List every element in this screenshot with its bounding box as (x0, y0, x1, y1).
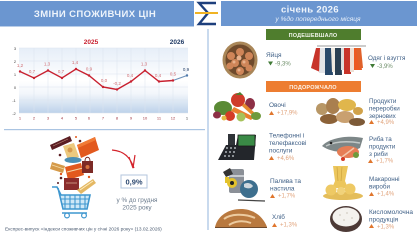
icon: telephone (218, 134, 256, 160)
item: dairy: продукція (369, 216, 399, 224)
data labels: 0,4 (127, 73, 134, 78)
x axis labels: 5 (75, 116, 78, 120)
item: pasta: +1,4% (377, 192, 395, 198)
line chart (12, 39, 190, 120)
y axis labels: 3 (14, 46, 17, 51)
data labels: 1,3 (44, 62, 51, 66)
item: vegetables: Овочі (269, 101, 286, 109)
data labels: 0,0 (101, 78, 108, 83)
caption: 2025 року (122, 204, 152, 212)
item: pasta (369, 175, 400, 198)
data labels: 1,3 (141, 62, 148, 66)
item: fuels: Палива та (270, 178, 301, 185)
y axis labels: -1 (12, 98, 17, 103)
left header banner (0, 1, 194, 27)
item: grain products (369, 98, 400, 126)
item: dairy: Кисломолочна (369, 209, 413, 216)
data labels: 1,2 (17, 63, 24, 68)
icon: sigma logo (195, 3, 218, 24)
item: fish (368, 135, 396, 164)
caption (116, 197, 158, 212)
item: fish: з риби (369, 150, 388, 158)
item: telecom services: +4,6% (277, 156, 295, 162)
y axis labels: 0 (14, 85, 17, 90)
icon: pasta (323, 166, 363, 200)
item: grain products: +4,9% (377, 120, 395, 126)
data points (19, 68, 188, 91)
item: fuels: настила (270, 186, 295, 192)
banner: more expensive: ПОДОРОЖЧАЛО (289, 85, 337, 91)
icon: bread (215, 209, 267, 228)
y axis labels: -2 (12, 111, 17, 116)
item: dairy (369, 209, 413, 230)
item: fish: Риба та (369, 135, 392, 143)
x axis labels: 12 (171, 116, 176, 120)
x axis labels: 7 (102, 116, 105, 120)
caption: у % до грудня (116, 197, 158, 204)
data line 2026 (173, 76, 187, 80)
right header banner (221, 1, 417, 26)
icon: shopping cart with goods (50, 136, 99, 218)
item: eggs: Яйця (266, 51, 282, 59)
item: fish: +1,7% (376, 158, 394, 164)
source note: Експрес-випуск «Індекси споживчих цін у січні 2026 року» (13.02.2026) (5, 226, 162, 232)
item: vegetables: +17,9% (277, 110, 298, 116)
banner: cheaper: ПОДЕШЕВШАЛО (289, 33, 338, 39)
icon: cottage cheese (330, 206, 362, 232)
data labels: 0,9 (183, 67, 190, 72)
data line 2025 (20, 69, 173, 90)
x axis labels: 9 (130, 116, 133, 120)
title: ЗМІНИ СПОЖИВЧИХ ЦІН (34, 9, 156, 20)
item: telecom services: Телефонні і (269, 132, 304, 140)
item: pasta: вироби (369, 182, 390, 190)
item: grain products: зернових (369, 113, 397, 120)
icon: vegetables (213, 92, 261, 122)
subtitle: у %до попереднього місяця (274, 15, 361, 23)
item: bread: +1,3% (280, 222, 298, 228)
date heading: січень 2026 (281, 4, 339, 16)
x axis labels (19, 116, 189, 120)
item: telecom services: телефаксові (269, 139, 306, 147)
item: clothing and footwear: -3,9% (377, 64, 393, 70)
section divider (4, 129, 205, 130)
x axis labels: 8 (116, 116, 119, 120)
data labels: -0,2 (113, 81, 121, 86)
year label 2025: 2025 (84, 39, 99, 46)
data labels: 1,4 (72, 60, 79, 65)
item: clothing and footwear: Одяг і взуття (368, 54, 405, 62)
x axis labels: 11 (157, 116, 162, 120)
item: grain products: переробки (369, 104, 400, 112)
x axis labels: 1 (186, 116, 189, 120)
item: eggs (266, 51, 291, 68)
callout: 0,9% (121, 175, 147, 188)
item: telecom services: послуги (269, 148, 293, 154)
callout: 0,9%: 0,9% (125, 178, 143, 186)
icon: fuel and globe (223, 168, 265, 201)
icon: fish (322, 137, 363, 161)
y axis labels: 2 (14, 59, 17, 64)
x axis labels: 1 (19, 116, 22, 120)
x axis labels: 3 (47, 116, 50, 120)
item: grain products: Продукти (369, 98, 397, 105)
banner: cheaper (266, 29, 361, 40)
y axis labels (12, 46, 17, 116)
data labels: 0,7 (58, 69, 65, 74)
item: pasta: Макаронні (369, 175, 400, 183)
x axis labels: 6 (88, 116, 91, 120)
data labels: 0,5 (170, 72, 177, 76)
item: eggs: -9,3% (275, 62, 291, 68)
data labels: 0,9 (86, 66, 93, 72)
item: bread: Хліб (272, 213, 285, 221)
item: telecom services (269, 132, 306, 162)
icon: eggs (222, 42, 258, 78)
data labels: 0,7 (29, 69, 36, 74)
x axis labels: 10 (143, 116, 148, 120)
item: fuels: +1,7% (278, 194, 296, 200)
item: fuels (270, 178, 301, 200)
item: dairy: +1,3% (377, 224, 395, 230)
item: vegetables (269, 101, 298, 116)
data labels: 0,4 (155, 73, 162, 78)
x axis labels: 4 (61, 116, 64, 120)
year label 2026: 2026 (170, 39, 185, 46)
banner: more expensive (266, 81, 361, 92)
icon: grain products (316, 98, 365, 126)
item: bread (272, 213, 298, 228)
y axis labels: 1 (14, 72, 17, 77)
data labels (17, 60, 190, 86)
column divider (207, 29, 209, 230)
item: clothing and footwear (368, 54, 405, 70)
x axis labels: 2 (33, 116, 36, 120)
icon: red arrow (112, 150, 135, 168)
icon: clothes (311, 46, 366, 75)
item: fish: продукти (369, 144, 396, 150)
